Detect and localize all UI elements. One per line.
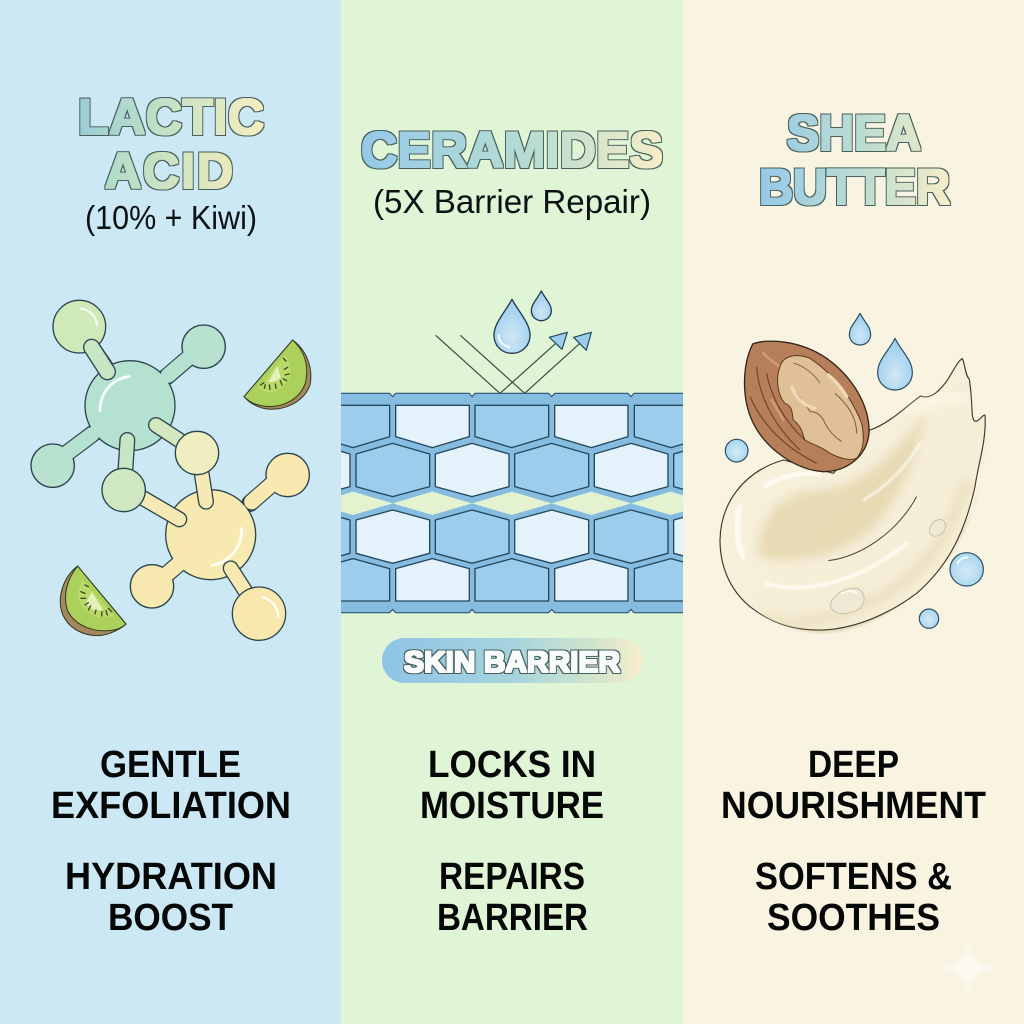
heading: lactic acid <box>78 89 264 199</box>
benefit: hydration boost: BOOST <box>108 897 233 939</box>
benefit: softens and soothes: SOFTENS & <box>755 856 952 898</box>
bubble: bottom <box>919 609 939 628</box>
bonds of the green molecule <box>67 350 190 453</box>
barrier band <box>338 393 688 613</box>
benefit: hydration boost <box>65 856 277 939</box>
atom: right <box>266 453 309 497</box>
bonds of the yellow molecule <box>160 480 277 580</box>
cell row 1 <box>316 405 708 448</box>
atom: large green <box>85 361 175 451</box>
icon: kiwi slice top right <box>244 340 311 409</box>
icon: small water drop <box>531 291 551 321</box>
atom: large yellow <box>166 490 256 580</box>
icon: large water drop <box>878 338 912 390</box>
icon: shea nut <box>744 341 869 472</box>
label: skin barrier pill: SKIN BARRIER <box>404 646 620 679</box>
arrows deflected from the barrier <box>436 332 591 393</box>
droplet on cream, large <box>830 588 864 614</box>
cream swirl <box>720 359 985 630</box>
diagram: skin barrier with deflected arrows <box>341 290 683 614</box>
atom: lower left <box>130 565 174 608</box>
atom: top right <box>182 325 225 368</box>
benefit: repairs barrier: BARRIER <box>437 897 588 939</box>
icon: small water drop <box>849 313 871 345</box>
benefit: locks in moisture <box>420 744 604 827</box>
subheading: 10% + kiwi: (10% + Kiwi) <box>85 199 257 236</box>
bubble: right <box>950 553 983 586</box>
benefit: gentle exfoliation: GENTLE <box>100 744 241 786</box>
icon: sparkle watermark <box>945 945 991 991</box>
atom: bottom right <box>232 587 286 640</box>
subheading: 5x barrier repair: (5X Barrier Repair) <box>373 183 651 220</box>
soft shadow under cream <box>723 427 988 633</box>
benefit: gentle exfoliation <box>51 744 291 827</box>
icon: kiwi slice bottom left <box>60 566 126 636</box>
droplet on cream, small <box>929 520 945 536</box>
heading: ceramides: CERAMIDES <box>361 122 663 178</box>
atom: shared link lower <box>102 468 145 512</box>
highlight: green atom <box>100 377 129 411</box>
benefit: softens and soothes: SOOTHES <box>767 897 940 939</box>
benefit: deep nourishment: DEEP <box>808 744 899 786</box>
atom: left <box>31 444 74 487</box>
highlight: top atom <box>81 309 97 325</box>
cell row 4 <box>316 559 708 601</box>
lipid layer between cell rows <box>341 492 683 515</box>
heading: lactic acid: LACTIC <box>78 89 264 145</box>
heading: shea butter: SHEA <box>787 105 921 161</box>
illustration: shea nut and butter swirl <box>720 313 988 633</box>
cover bonds inside atoms <box>63 347 188 477</box>
benefit: deep nourishment: NOURISHMENT <box>721 785 986 827</box>
label: skin barrier pill <box>382 638 643 683</box>
benefit: locks in moisture: LOCKS IN <box>428 744 596 786</box>
panel: lactic acid <box>0 0 341 1024</box>
highlight: bottom atom <box>263 597 279 617</box>
benefit: hydration boost: HYDRATION <box>65 856 277 898</box>
bubble: left <box>725 439 748 462</box>
cell row 2 <box>341 442 683 498</box>
benefit: deep nourishment <box>721 744 986 827</box>
benefit: softens and soothes <box>755 856 952 939</box>
cell row 3 <box>341 509 683 564</box>
benefit: repairs barrier <box>437 856 588 939</box>
highlight: yellow atom <box>212 529 241 565</box>
panel: ceramides <box>341 0 683 1024</box>
benefit: repairs barrier: REPAIRS <box>439 856 585 898</box>
icon: large water drop <box>494 299 530 353</box>
icon: molecule with kiwi slices <box>31 300 311 640</box>
benefit: gentle exfoliation: EXFOLIATION <box>51 785 291 827</box>
atom: top left <box>53 300 106 353</box>
panel: shea butter <box>683 0 1024 1024</box>
atom: shared link right <box>175 431 219 475</box>
heading: shea butter <box>759 105 950 215</box>
heading: shea butter: BUTTER <box>759 159 950 215</box>
benefit: locks in moisture: MOISTURE <box>420 785 604 827</box>
heading: lactic acid: ACID <box>105 143 233 199</box>
